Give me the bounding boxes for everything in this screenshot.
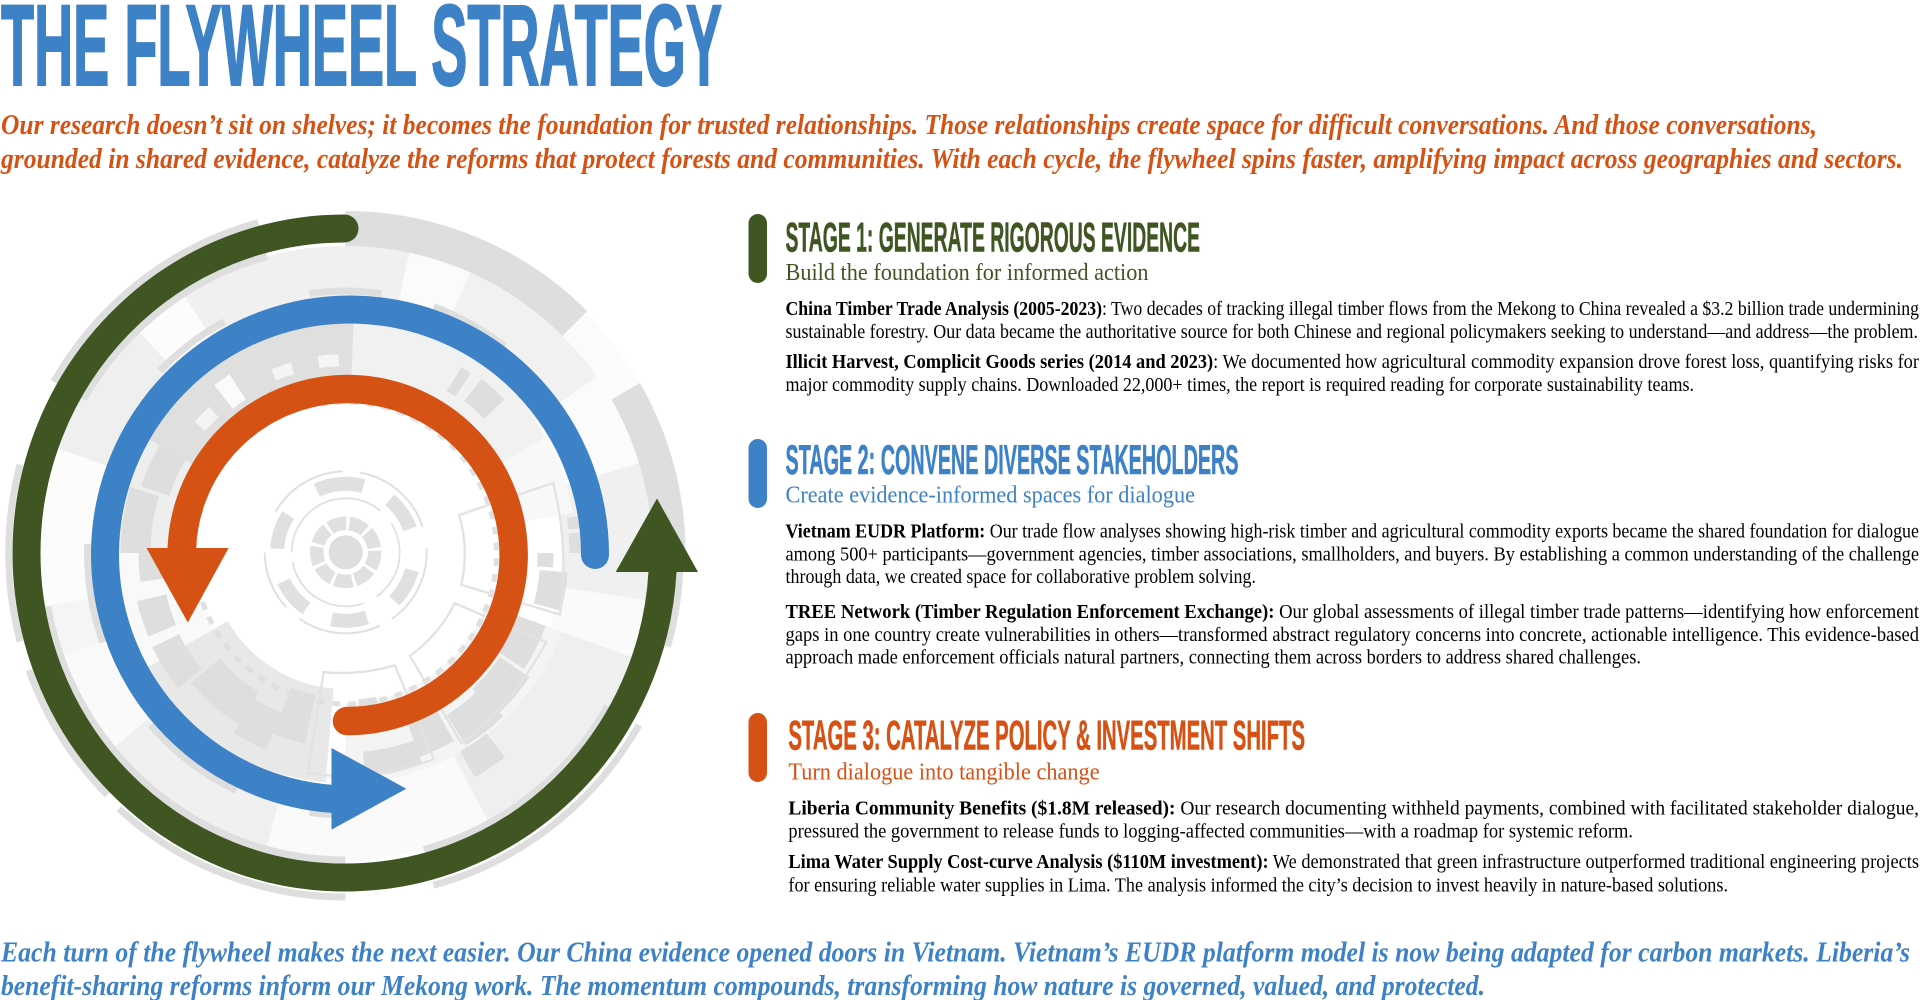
- stage 3 marker: [748, 713, 767, 782]
- intro paragraph: [0, 109, 1903, 175]
- stage 2 body: Vietnam EUDR: [786, 522, 1919, 588]
- panel: stage 2: STAGE 2: CONVENE DIVERSE STAKEHOLDERS: [786, 436, 1238, 483]
- stage 1 subtitle: Build the foundation for informed action: [786, 259, 1148, 286]
- panel: stage 3: [748, 712, 1919, 896]
- stage 1 body: Illicit Harvest: major commodity supply chains. Downloaded 22,000+ times, the report is required reading for corporate sustainability teams.: [786, 375, 1694, 396]
- thin shadows: [0, 69, 822, 1000]
- stage 2 body: TREE Network: approach made enforcement officials natural partners, connecting them across borders to address shared challenges.: [786, 648, 1641, 668]
- closing paragraph: [0, 937, 1910, 1000]
- stage 2 body: TREE Network: TREE Network (Timber Regulation Enforcement Exchange): Our global assessments of illegal timber trade patterns—identifying how enforcement: [786, 602, 1920, 623]
- stage 1 marker: [748, 214, 767, 283]
- stage 2 body: TREE Network: [786, 602, 1920, 668]
- outlined boxes: [308, 483, 563, 776]
- stage 3 body: Liberia: pressured the government to release funds to logging-affected communities—with a roadmap for systemic reform.: [788, 822, 1633, 842]
- panel: stage 2: [748, 436, 1920, 668]
- stage 2 subtitle: Create evidence-informed spaces for dialogue: [786, 482, 1195, 508]
- white core: [200, 406, 492, 698]
- panel: stage 1: [748, 214, 1919, 396]
- stage 3 body: Lima: [788, 852, 1919, 896]
- light strips: [68, 275, 623, 831]
- hub: [231, 438, 460, 667]
- background mandala: [0, 69, 822, 1000]
- stage 3 body: Liberia: [788, 798, 1919, 842]
- stage 3 body: Liberia: Liberia Community Benefits ($1.8M released): Our research documenting withheld payments, combined with facilitated stakeholder dialogue,: [788, 798, 1919, 820]
- stage 1 body: China Timber Trade: [786, 299, 1919, 343]
- arrow: stage 1 green: [26, 228, 698, 878]
- stage 3 subtitle: Turn dialogue into tangible change: [788, 758, 1100, 786]
- arrow: stage 2 blue: [105, 309, 595, 830]
- panel: stage 3: STAGE 3: CATALYZE POLICY & INVESTMENT SHIFTS: [788, 712, 1305, 758]
- stage 2 body: Vietnam EUDR: through data, we created space for collaborative problem solving.: [786, 567, 1256, 588]
- base of inner band: [83, 291, 608, 815]
- flywheel diagram: [0, 69, 822, 1000]
- stage 3 body: Lima: for ensuring reliable water supplies in Lima. The analysis informed the city’s decision to invest heavily in nature-based solutions.: [788, 876, 1728, 896]
- panel: stage 1: STAGE 1: GENERATE RIGOROUS EVIDENCE: [786, 214, 1200, 261]
- stage 2 marker: [748, 439, 767, 508]
- arrow: stage 3 orange: [146, 389, 514, 721]
- stage 1 body: Illicit Harvest: [786, 352, 1919, 396]
- blocks: [3, 211, 688, 895]
- lower base: [86, 293, 605, 813]
